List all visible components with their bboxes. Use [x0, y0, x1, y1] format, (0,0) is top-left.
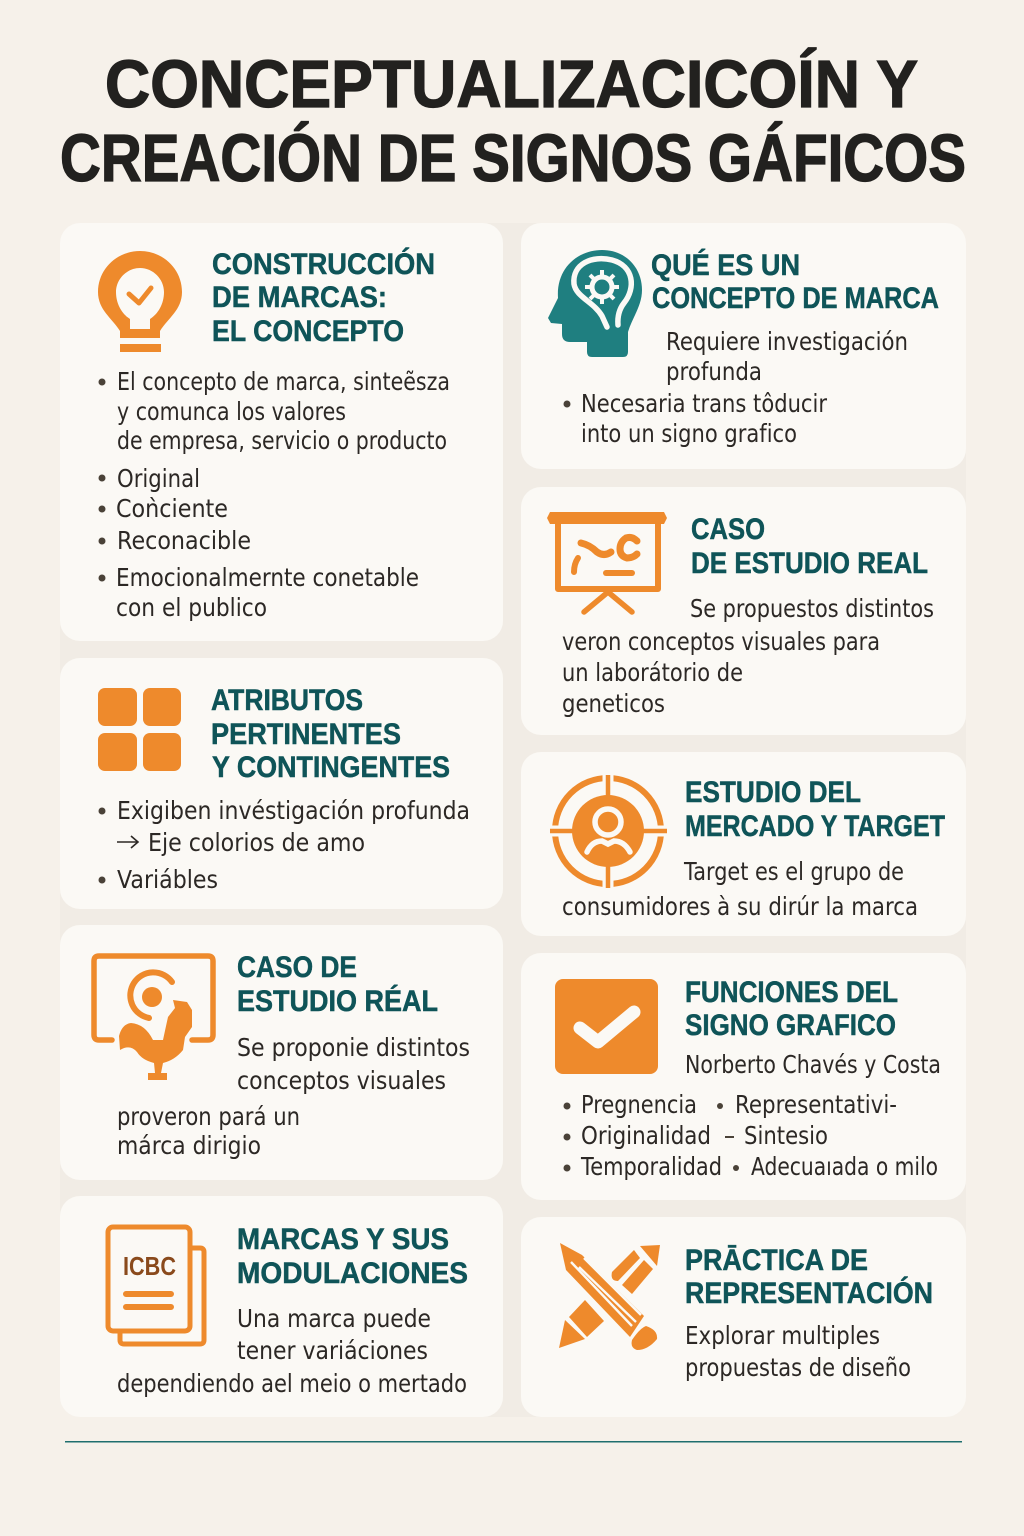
body text: Necesaria trans tôducir	[581, 389, 828, 418]
body text: tener variáciones	[237, 1336, 428, 1365]
body text	[564, 1050, 941, 1181]
bullet list: con el publico	[116, 593, 267, 622]
body text: Target es el grupo de	[683, 857, 904, 886]
heading: DE ESTUDIO REAL	[691, 547, 928, 580]
body text: proveron pará un	[117, 1102, 300, 1131]
heading: CONSTRUCCIÓN	[212, 247, 435, 281]
bullet list: Eje colorios de amo	[148, 828, 365, 857]
panel: qué es un concepto de marca	[521, 223, 966, 469]
heading: ESTUDIO RÉAL	[237, 984, 438, 1018]
body text: propuestas de diseño	[685, 1353, 911, 1382]
body text: geneticos	[562, 689, 665, 718]
heading	[211, 684, 450, 784]
icon: presentation board	[547, 512, 667, 612]
heading: PRĀCTICA DE	[685, 1244, 868, 1277]
heading	[212, 247, 435, 348]
body text	[117, 1033, 470, 1160]
body text: Sintesio	[744, 1121, 828, 1150]
title	[60, 47, 966, 196]
body text	[685, 1321, 911, 1382]
bullet list: Exigiben invéstigación profunda	[117, 796, 470, 825]
body text: Pregnencia	[581, 1090, 697, 1119]
heading	[691, 513, 928, 580]
body text: Originalidad	[581, 1121, 711, 1150]
heading	[651, 248, 939, 315]
heading: CONCEPTO DE MARCA	[652, 282, 939, 315]
body text: Se proponie distintos	[237, 1033, 470, 1062]
panel: marcas y sus modulaciones	[60, 1196, 503, 1417]
bullet list: Original	[117, 464, 200, 493]
icon: screen with rooster	[94, 956, 213, 1080]
body text: profunda	[666, 357, 762, 386]
bullet list: y comunca los valores	[117, 397, 346, 426]
icon: light bulb with check	[98, 251, 182, 352]
body text: un laborátorio de	[562, 658, 743, 687]
heading: MERCADO Y TARGET	[685, 810, 945, 843]
body text	[117, 1304, 467, 1398]
body text	[562, 594, 934, 718]
body text: into un signo grafico	[581, 419, 797, 448]
icon: documents ICBC	[108, 1227, 204, 1344]
body text: Norberto Chavés y Costa	[685, 1050, 941, 1079]
heading: ATRIBUTOS	[211, 684, 363, 717]
body text: márca dirigio	[117, 1131, 261, 1160]
bullet list	[98, 367, 450, 622]
icon: four squares	[98, 688, 181, 771]
body text: Se propuestos distintos	[690, 594, 934, 623]
body text: Explorar multiples	[685, 1321, 880, 1350]
bullet list: El concepto de marca, sinteẽsza	[117, 367, 450, 396]
heading: CASO	[691, 513, 765, 546]
heading	[685, 976, 898, 1042]
heading	[685, 776, 945, 843]
icon: documents ICBC: ICBC	[123, 1251, 176, 1281]
panel: práctica de representación	[521, 1217, 966, 1417]
body text: Una marca puede	[237, 1304, 431, 1333]
body text	[562, 857, 918, 921]
panel: estudio del mercado y target	[521, 752, 966, 936]
panel: construcción de marcas	[60, 223, 503, 641]
panel: atributos pertinentes	[60, 658, 503, 909]
icon: check box	[555, 979, 658, 1074]
heading: QUÉ ES UN	[651, 248, 800, 282]
bullet list: Coǹciente	[116, 494, 228, 523]
heading: MODULACIONES	[237, 1257, 468, 1290]
heading: MARCAS Y SUS	[237, 1223, 449, 1256]
title: CONCEPTUALIZACICOÍN Y	[105, 47, 918, 122]
heading: SIGNO GRAFICO	[685, 1009, 896, 1042]
body text: conceptos visuales	[237, 1066, 446, 1095]
icon: target with person	[546, 770, 670, 893]
heading: REPRESENTACIÓN	[685, 1276, 933, 1310]
heading: DE MARCAS:	[212, 281, 387, 314]
panel: funciones del signo gráfico	[521, 953, 966, 1200]
bullet list: Variábles	[117, 865, 218, 894]
body text: Requiere investigación	[666, 327, 908, 356]
bullet list: Emocionalmernte conetable	[116, 563, 419, 592]
bullet list: Reconacible	[117, 526, 251, 555]
heading	[237, 1223, 468, 1290]
body text: Temporalidad	[580, 1152, 722, 1181]
heading	[685, 1244, 933, 1310]
body text	[564, 327, 908, 448]
body text: consumidores à su dirúr la marca	[562, 892, 918, 921]
panel: caso de estudio real (pizarra)	[521, 487, 966, 735]
heading: ESTUDIO DEL	[685, 776, 861, 809]
panel: caso de estudio real (gallo)	[60, 925, 503, 1180]
heading: FUNCIONES DEL	[685, 976, 898, 1009]
heading	[237, 951, 438, 1018]
body text: dependiendo ael meio o mertado	[117, 1369, 467, 1398]
body text: Adecuaıada o milo	[751, 1152, 938, 1181]
heading: CASO DE	[237, 951, 357, 984]
icon: head with gear	[548, 250, 642, 357]
heading: Y CONTINGENTES	[212, 751, 450, 784]
icon: crossed pencils	[559, 1243, 660, 1350]
bullet list	[98, 796, 470, 894]
bullet list: de empresa, servicio o producto	[117, 426, 447, 455]
heading: EL CONCEPTO	[212, 315, 404, 348]
heading: PERTINENTES	[211, 718, 401, 751]
body text: Representativi-	[735, 1090, 897, 1119]
body text: veron conceptos visuales para	[562, 627, 880, 656]
